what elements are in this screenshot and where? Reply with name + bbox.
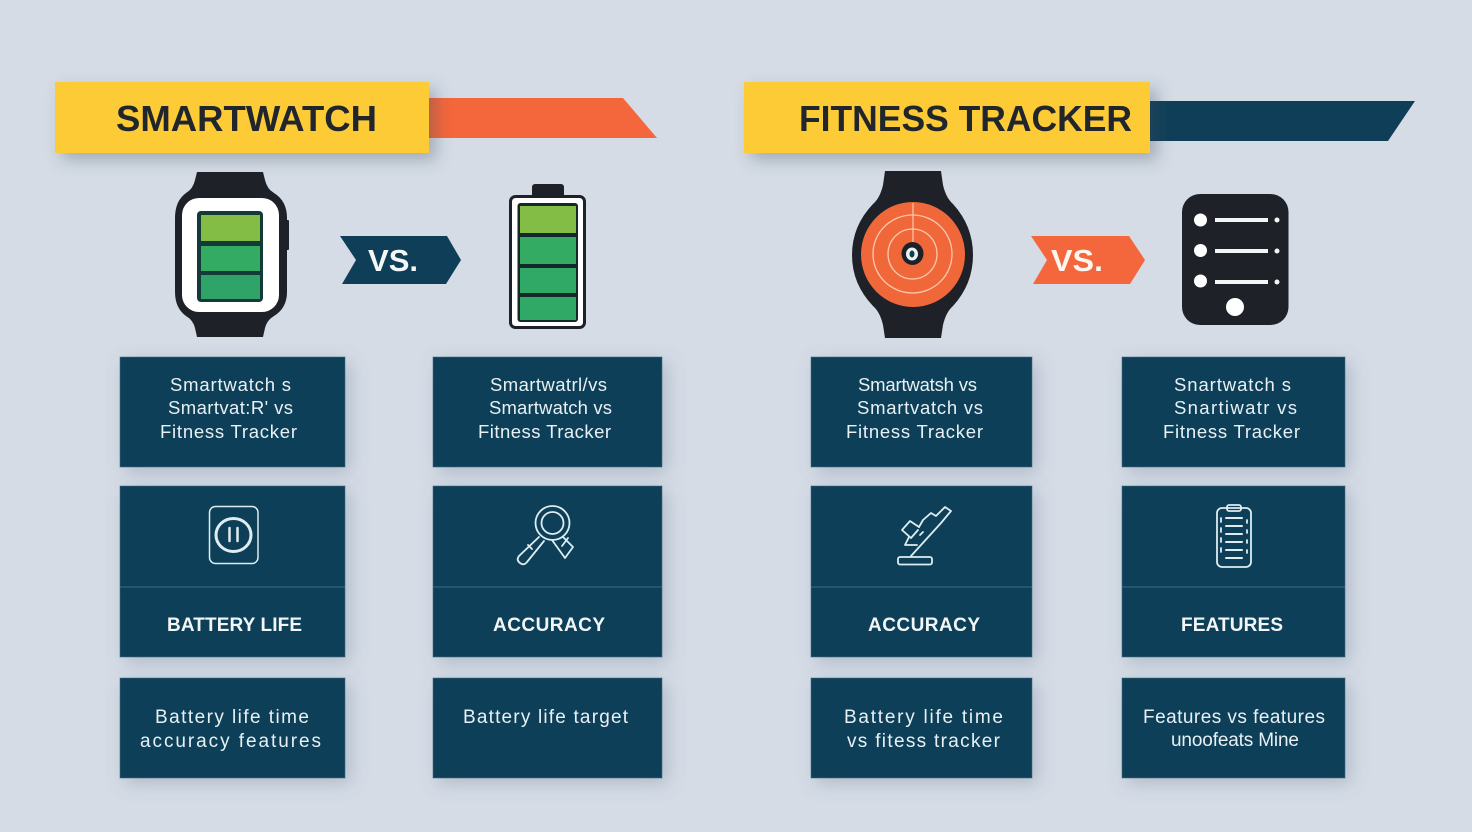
icon: fitness tracker round watch (852, 171, 973, 338)
panel: top text card 4: Snartwatch s (1174, 374, 1291, 395)
panel: bottom text card 1: Battery life time (155, 707, 309, 728)
panel: top text card 1: Smartvat:R' vs (168, 397, 293, 418)
arrow: vs badge orange (1031, 236, 1145, 284)
arrow: vs badge navy: VS. (368, 243, 418, 278)
icon: feature list device (1182, 194, 1288, 325)
icon: power button (210, 506, 258, 564)
panel: top text card 2: Smartwatch vs (489, 397, 612, 418)
panel: fitness tracker header (744, 82, 1415, 153)
navy ribbon (1150, 101, 1415, 141)
icon: clipboard checklist (1217, 505, 1251, 567)
panel: top text card 3: Fitness Tracker (846, 421, 983, 442)
panel: bottom text card 2 (433, 678, 662, 778)
icon: microscope (898, 507, 951, 564)
panel: top text card 4: Snartiwatr vs (1174, 397, 1297, 418)
panel: top text card 3 (811, 357, 1032, 467)
orange ribbon (429, 98, 657, 138)
panel: top text card 2 (433, 357, 662, 467)
panel: top text card 3: Smartwatsh vs (858, 374, 977, 395)
label: accuracy: ACCURACY (493, 615, 605, 636)
arrow: vs badge navy (340, 236, 461, 284)
panel: bottom text card 4 (1122, 678, 1345, 778)
icon: magnifier with ribbon (518, 506, 573, 564)
panel: top text card 1 (120, 357, 345, 467)
icon: battery (510, 184, 584, 328)
panel: bottom text card 1 (120, 678, 345, 778)
label: battery life: BATTERY LIFE (167, 615, 302, 636)
label: features: FEATURES (1181, 615, 1283, 636)
panel: bottom text card 3: Battery life time (844, 707, 1003, 728)
panel: top text card 2: Fitness Tracker (478, 421, 611, 442)
icon: smartwatch with battery screen (175, 172, 289, 337)
panel: top text card 2: Smartwatrl/vs (490, 374, 607, 395)
panel: top text card 4 (1122, 357, 1345, 467)
panel: features card (1122, 486, 1345, 657)
panel: accuracy card 1 (433, 486, 662, 657)
label: accuracy: ACCURACY (868, 615, 980, 636)
panel: smartwatch header (55, 82, 657, 153)
panel: bottom text card 4: unoofeats Mine (1171, 730, 1299, 751)
panel: top text card 1: Smartwatch s (170, 374, 291, 395)
title: fitness tracker: FITNESS TRACKER (799, 98, 1132, 139)
panel: top text card 4: Fitness Tracker (1163, 421, 1300, 442)
panel: bottom text card 3: vs fitess tracker (847, 731, 1001, 752)
panel: top text card 3: Smartvatch vs (857, 397, 983, 418)
arrow: vs badge orange: VS. (1051, 243, 1103, 278)
panel: bottom text card 2: Battery life target (463, 707, 629, 728)
panel: bottom text card 1: accuracy features (140, 731, 321, 752)
yellow title banner (55, 82, 429, 153)
panel: accuracy card 2 (811, 486, 1032, 657)
title: smartwatch: SMARTWATCH (116, 98, 377, 139)
panel: bottom text card 4: Features vs features (1143, 707, 1325, 728)
panel: top text card 1: Fitness Tracker (160, 421, 297, 442)
yellow title banner (744, 82, 1150, 153)
panel: bottom text card 3 (811, 678, 1032, 778)
panel: battery life card (120, 486, 345, 657)
